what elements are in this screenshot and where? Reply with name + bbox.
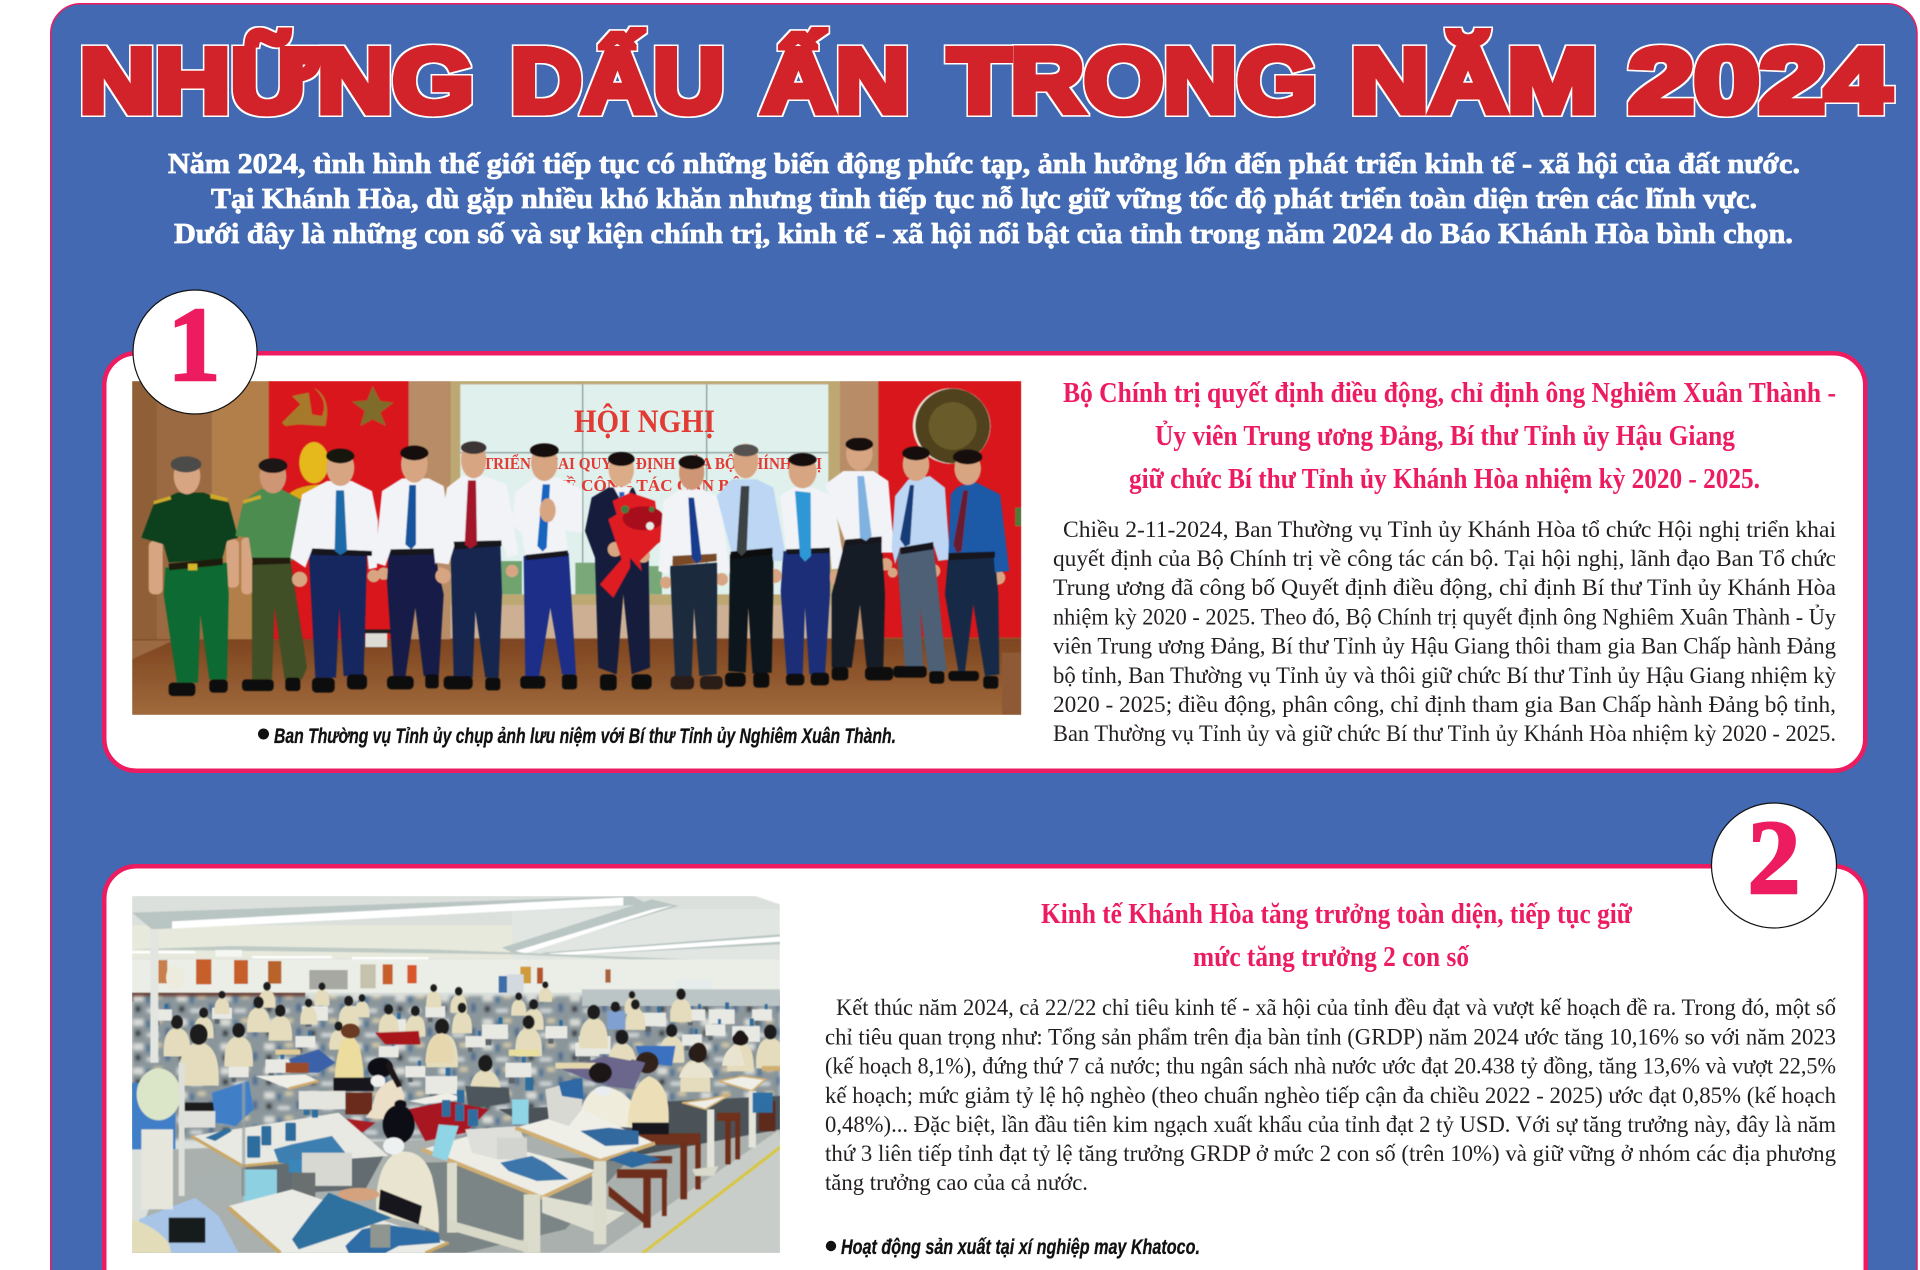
person: army officer <box>141 456 239 696</box>
tables, stools, machines and operators <box>132 929 780 1253</box>
person: secretary holding bouquet <box>585 452 685 690</box>
body text 1: viên Trung ương Đảng, Bí thư Tỉnh ủy Hậu Giang thôi tham gia Ban Chấp hành Đảng <box>1053 634 1836 658</box>
conference screen text: TRIỂN KHAI QUYẾT ĐỊNH CỦA BỘ CHÍNH TRỊ <box>483 454 822 473</box>
heading 1: Ủy viên Trung ương Đảng, Bí thư Tỉnh ủy Hậu Giang <box>1155 419 1735 452</box>
sewing machines row (crowd background) <box>152 981 785 1102</box>
body text 2: chỉ tiêu quan trọng như: Tổng sản phẩm trên địa bàn tỉnh (GRDP) năm 2024 ước tăng 10,16% so với năm 2023 <box>825 1024 1836 1050</box>
floor <box>132 1096 780 1253</box>
title <box>80 30 1891 132</box>
number badge 1 <box>133 286 257 414</box>
caption 2: Hoạt động sản xuất tại xí nghiệp may Khatoco. <box>841 1236 1200 1259</box>
photo 1: hall background <box>132 381 1021 715</box>
title: ẤN <box>762 30 910 132</box>
crowd texture <box>132 996 780 1139</box>
body text 1: quyết định của Bộ Chính trị về công tác cán bộ. Tại hội nghị, lãnh đạo Ban Tổ chức <box>1053 546 1836 571</box>
body text 1 <box>1053 517 1836 746</box>
intro text <box>168 148 1800 250</box>
body text 1: Chiều 2-11-2024, Ban Thường vụ Tỉnh ủy Khánh Hòa tổ chức Hội nghị triển khai <box>1063 517 1836 542</box>
person: officials on the right <box>658 455 730 689</box>
body text 1: nhiệm kỳ 2020 - 2025. Theo đó, Bộ Chính trị quyết định ông Nghiêm Xuân Thành - Ủy <box>1053 604 1836 630</box>
heading 1: giữ chức Bí thư Tỉnh ủy Khánh Hòa nhiệm kỳ 2020 - 2025. <box>1129 463 1760 495</box>
title: NHỮNG <box>80 31 474 132</box>
conference screen text: HỘI NGHỊ <box>574 402 715 440</box>
intro text: Năm 2024, tình hình thế giới tiếp tục có những biến động phức tạp, ảnh hưởng lớn đến phát triển kinh tế - xã hội của đất nước. <box>168 148 1800 180</box>
title: NĂM <box>1350 31 1598 132</box>
body text 1: Trung ương đã công bố Quyết định điều động, chỉ định Bí thư Tỉnh ủy Khánh Hòa <box>1053 575 1836 600</box>
caption 1: Ban Thường vụ Tỉnh ủy chụp ảnh lưu niệm với Bí thư Tỉnh ủy Nghiêm Xuân Thành. <box>274 725 896 748</box>
heading 2: mức tăng trưởng 2 con số <box>1193 941 1469 973</box>
photo 2: garment factory floor <box>132 896 785 1253</box>
intro text: Dưới đây là những con số và sự kiện chính trị, kinh tế - xã hội nổi bật của tỉnh trong năm 2024 do Báo Khánh Hòa bình chọn. <box>174 218 1793 250</box>
body text 2: kế hoạch; mức giảm tỷ lệ hộ nghèo (theo chuẩn nghèo tiếp cận đa chiều 2022 - 2025) ước đạt 0,85% (kế hoạch <box>825 1083 1836 1108</box>
body text 2: thứ 3 liên tiếp tỉnh đạt tỷ lệ tăng trưởng GRDP ở mức 2 con số (trên 10%) và giữ vững ở nhóm các địa phương <box>825 1141 1836 1166</box>
number badge 2: 2 <box>1748 799 1800 916</box>
person: officials in white shirts <box>290 449 380 693</box>
body text 2: 0,48%)... Đặc biệt, lần đầu tiên kim ngạch xuất khẩu của tỉnh đạt 2 tỷ USD. Với sự tăng trưởng này, đây là năm <box>825 1112 1836 1137</box>
heading 1 <box>1063 377 1836 495</box>
body text 1: bộ tỉnh, Ban Thường vụ Tỉnh ủy và thôi giữ chức Bí thư Tỉnh ủy Hậu Giang nhiệm kỳ <box>1053 663 1836 688</box>
people in group portrait <box>141 437 1009 696</box>
heading 2 <box>1041 898 1633 973</box>
panel 2: economy <box>104 866 1866 1270</box>
heading 1: Bộ Chính trị quyết định điều động, chỉ định ông Nghiêm Xuân Thành - <box>1063 377 1836 409</box>
number badge 1: 1 <box>168 286 220 403</box>
person: police officer <box>235 458 307 691</box>
body text 2: Kết thúc năm 2024, cả 22/22 chỉ tiêu kinh tế - xã hội của tỉnh đều đạt và vượt kế hoạch đề ra. Trong đó, một số <box>836 995 1836 1020</box>
title: TRONG <box>948 31 1316 132</box>
conference screen text <box>483 402 822 495</box>
body text 2: tăng trưởng cao của cả nước. <box>825 1170 1088 1195</box>
body text 2: (kế hoạch 8,1%), đứng thứ 7 cả nước; thu ngân sách nhà nước ước đạt 20.438 tỷ đồng, tăng 13,6% và vượt 22,5% <box>825 1054 1836 1078</box>
body text 2 <box>825 995 1836 1195</box>
panel 1: party personnel decision <box>104 353 1865 771</box>
body text 1: 2020 - 2025; điều động, phân công, chỉ định tham gia Ban Chấp hành Đảng bộ tỉnh, <box>1053 692 1836 717</box>
title: DẤU <box>510 30 724 132</box>
intro text: Tại Khánh Hòa, dù gặp nhiều khó khăn nhưng tỉnh tiếp tục nỗ lực giữ vững tốc độ phát triển toàn diện trên các lĩnh vực. <box>211 183 1757 215</box>
title: 2024 <box>1628 31 1891 132</box>
heading 2: Kinh tế Khánh Hòa tăng trưởng toàn diện, tiếp tục giữ <box>1041 898 1633 930</box>
body text 1: Ban Thường vụ Tỉnh ủy và giữ chức Bí thư Tỉnh ủy Khánh Hòa nhiệm kỳ 2020 - 2025. <box>1053 721 1836 746</box>
number badge 2 <box>1712 799 1836 928</box>
conference screen text: VỀ CÔNG TÁC CÁN BỘ <box>553 476 743 495</box>
